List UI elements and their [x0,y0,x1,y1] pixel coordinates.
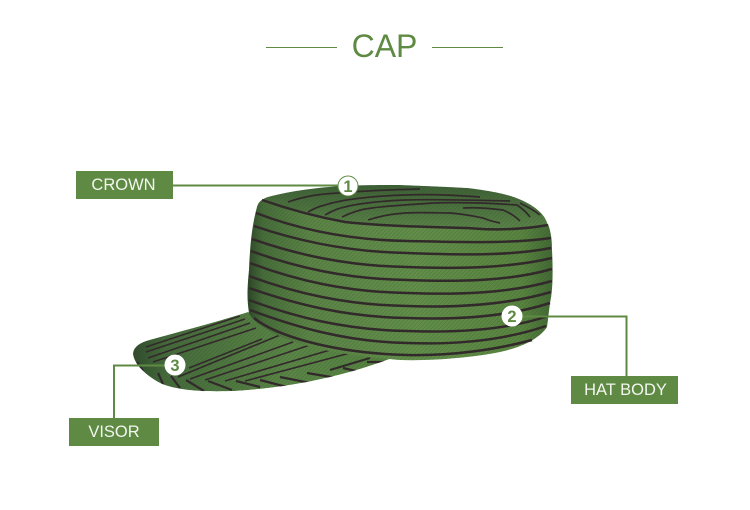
label: crown [76,171,173,199]
label: hat body: HAT BODY [584,381,667,399]
marker 3: 3 [170,357,180,375]
callout: crown [76,171,340,199]
crown top [257,185,550,240]
label: visor: VISOR [88,423,140,441]
marker 1: 1 [343,178,353,196]
label: hat body [571,376,678,404]
label: crown: CROWN [91,176,156,194]
callout: hat body [520,316,678,404]
hat body [248,200,553,360]
cap illustration [133,185,553,391]
title: CAP [352,28,417,64]
visor [133,312,395,391]
marker 1 [338,176,358,196]
marker 3 [164,354,186,376]
callout: visor [69,366,168,446]
marker 2 [502,306,522,326]
marker 2: 2 [507,308,517,326]
